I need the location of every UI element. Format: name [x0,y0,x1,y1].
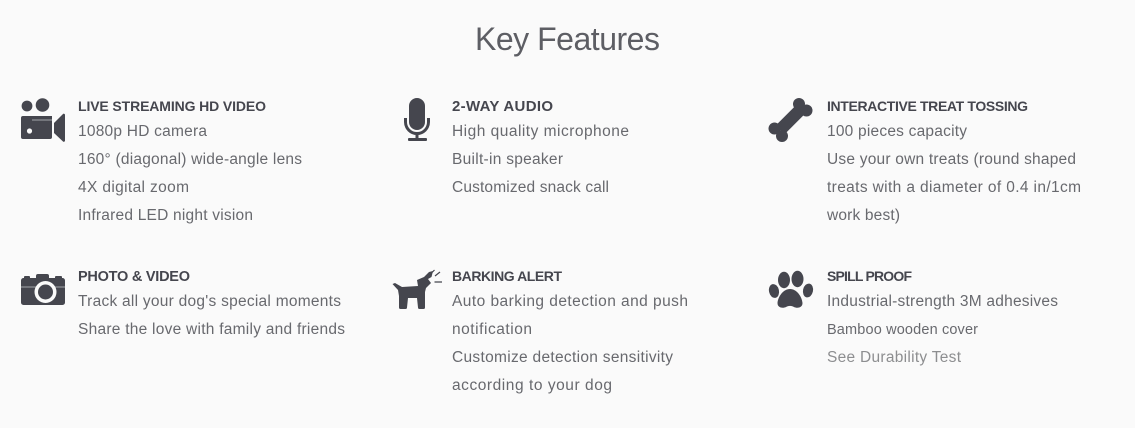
panel: barking alert [392,268,688,394]
feature list: audio: High quality microphone [452,123,629,140]
feature list: treats: Use your own treats (round shaped [827,151,1076,168]
feature list: video: Infrared LED night vision [78,207,253,224]
feature list: video: 160° (diagonal) wide-angle lens [78,151,302,168]
feature list: spill proof: See Durability Test [827,349,962,366]
panel: 2-way audio [406,98,629,196]
feature list: treats [826,123,1081,224]
heading: spill proof: SPILL PROOF [827,268,912,284]
feature list: audio: Customized snack call [452,179,609,196]
icon: barking dog [392,270,442,309]
feature list: barking: notification [452,321,532,338]
feature list: barking: Auto barking detection and push [452,293,688,310]
heading: live streaming hd video: LIVE STREAMING HD VIDEO [78,98,266,114]
feature list: spill proof: Industrial-strength 3M adhesives [827,293,1058,310]
feature list: photo [78,293,345,338]
feature list: barking: according to your dog [452,377,612,394]
feature list: spill proof [827,293,1058,366]
heading: interactive treat tossing: INTERACTIVE TREAT TOSSING [827,98,1028,114]
feature list: audio [452,123,629,196]
heading: photo and video: PHOTO & VIDEO [78,269,190,285]
panel: spill proof [768,268,1058,366]
feature list: photo: Track all your dog's special moments [78,293,341,310]
feature list: treats: work best) [826,207,900,224]
heading: barking alert: BARKING ALERT [452,268,562,284]
title: Key Features [475,21,660,57]
feature list: treats: 100 pieces capacity [827,123,967,140]
icon: microphone [406,98,428,141]
feature list: video: 1080p HD camera [78,123,207,140]
icon: paw print [768,271,814,308]
panel: interactive treat tossing [768,98,1081,224]
feature list: video: 4X digital zoom [78,179,189,196]
feature list: barking: Customize detection sensitivity [452,349,673,366]
feature list: photo: Share the love with family and friends [78,321,345,338]
feature list: barking [452,293,688,394]
feature list: treats: treats with a diameter of 0.4 in/1cm [827,179,1081,196]
icon: bone [768,98,812,142]
feature list: audio: Built-in speaker [452,151,563,168]
panel: live streaming hd video [21,98,302,224]
icon: camera [21,274,65,305]
panel: photo and video [21,269,345,338]
feature list: spill proof: Bamboo wooden cover [827,322,978,338]
feature list: video [78,123,302,224]
heading: 2-way audio: 2-WAY AUDIO [452,98,553,115]
icon: video camera [21,98,65,142]
